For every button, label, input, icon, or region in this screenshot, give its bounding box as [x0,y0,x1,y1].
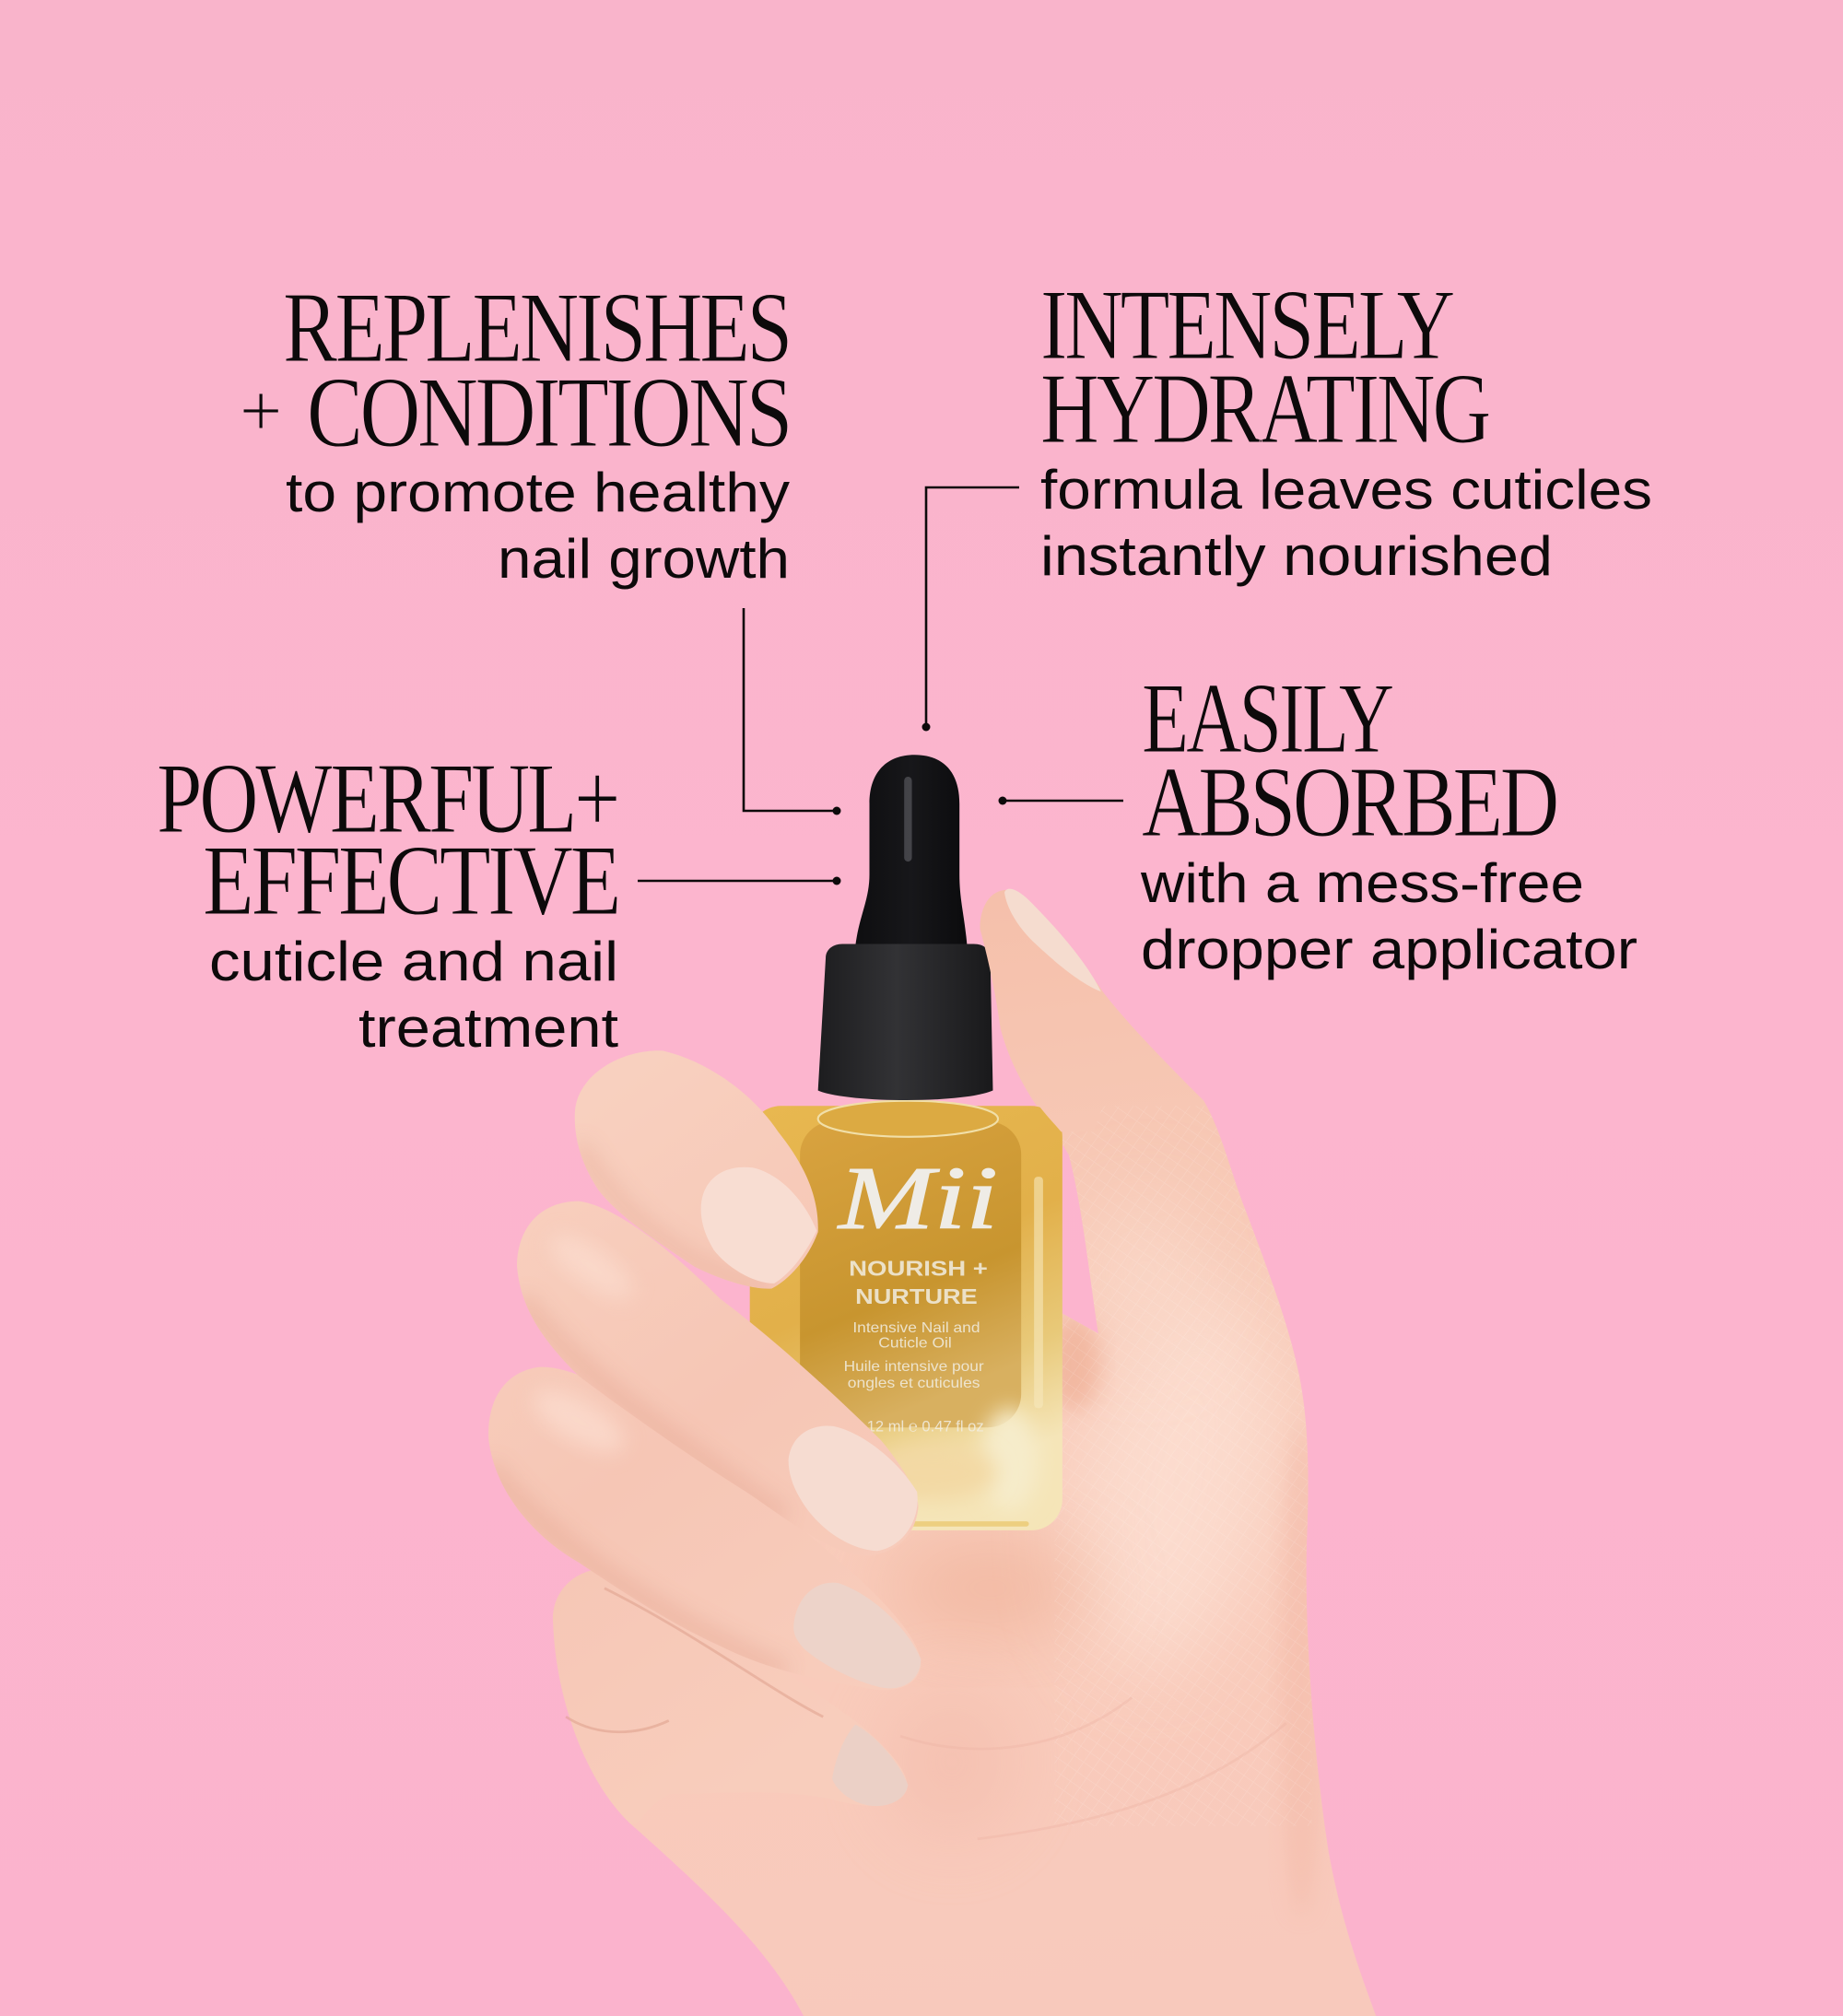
body text [286,462,790,590]
body text [209,931,618,1059]
body text: dropper applicator [1141,919,1638,980]
body text: formula leaves cuticles [1040,459,1652,521]
label text: Cuticle Oil [878,1336,952,1352]
label text: ongles et cuticules [848,1376,980,1391]
glass highlights [784,1101,1043,1527]
dropper highlight [904,777,912,861]
heading [240,272,790,468]
heading: ABSORBED [1142,746,1556,858]
arrow: hydrating leader [922,487,1019,732]
index finger [575,1050,818,1293]
little finger [553,1569,908,1823]
middle finger [517,1201,919,1556]
arrow: powerful leader [638,877,840,885]
body text [1140,852,1638,980]
arrow: replenishes leader [744,608,840,815]
arrow: absorbed leader [999,796,1123,805]
heading: CONDITIONS [307,357,790,468]
ring finger [488,1367,921,1690]
label text: NOURISH + [849,1257,988,1281]
heading: + [240,369,282,452]
inner oil [800,1121,1021,1427]
body text: instantly nourished [1040,525,1553,587]
callout: powerful + effective [157,743,618,1059]
label text [836,1149,998,1435]
little finger nail [832,1725,908,1806]
heading: HYDRATING [1040,353,1489,464]
body text [1040,459,1652,587]
label text: Mii [836,1149,998,1248]
ring finger nail [793,1583,921,1688]
callout: intensely hydrating [1040,269,1652,587]
thumb nail [1004,889,1101,991]
middle finger nail [789,1426,918,1551]
heading [1142,662,1556,858]
body text: cuticle and nail [209,931,618,992]
label text: Huile intensive pour [844,1359,984,1375]
body text: to promote healthy [286,462,790,523]
bottle [750,755,1062,1530]
heading: EFFECTIVE [203,825,618,936]
label text: 12 ml ℮ 0.47 fl oz [867,1417,984,1435]
heading [1040,269,1489,464]
body text: treatment [358,997,618,1059]
palm and wrist [553,890,1376,2016]
index finger nail [701,1167,816,1283]
label text: Intensive Nail and [852,1320,980,1336]
thumb [980,889,1132,1131]
dropper collar cap [818,944,992,1100]
body text: with a mess-free [1140,852,1584,914]
heading: EASILY [1142,662,1392,774]
body text: nail growth [498,528,790,590]
dropper bulb [855,755,968,946]
heading [157,743,618,936]
heading: INTENSELY [1040,269,1453,381]
product photo: hand holding dropper bottle [488,755,1376,2016]
callout: easily absorbed [1140,662,1638,980]
label text: NURTURE [855,1284,978,1308]
heading: POWERFUL+ [157,743,617,854]
wrist creases [566,1588,823,1732]
glass body [750,1106,1062,1530]
heading: REPLENISHES [283,272,790,383]
callout: replenishes + conditions [240,272,790,590]
